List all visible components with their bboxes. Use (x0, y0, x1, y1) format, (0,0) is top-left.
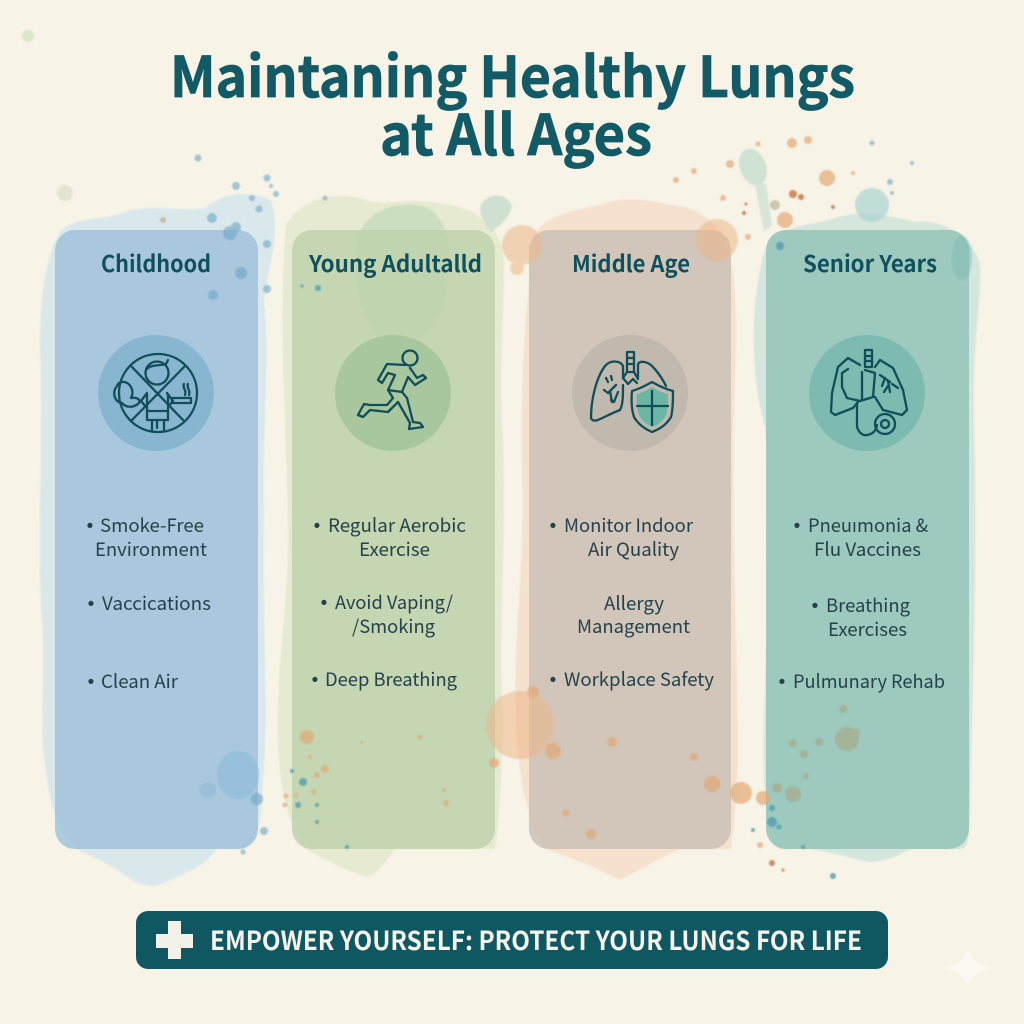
icon: no smoking child (98, 335, 214, 451)
list: Childhood: Smoke-Free (100, 512, 204, 538)
list: Young Adult: Exercise (359, 536, 430, 562)
heading: Middle Age: Middle Age (572, 245, 690, 279)
list: Young Adult: Deep Breathing (325, 666, 458, 692)
list: Childhood: • (88, 594, 94, 615)
title: at All Ages (380, 91, 652, 172)
icon: runner (335, 335, 451, 451)
banner: call to action (136, 911, 888, 969)
panel: Senior Years (766, 230, 969, 849)
list: Childhood: Vaccications (102, 590, 211, 616)
icon: lungs with stethoscope (809, 335, 925, 451)
list: Senior Years: Exercises (828, 616, 907, 642)
title: Maintaning Healthy Lungs (170, 33, 855, 114)
banner text: EMPOWER YOURSELF: PROTECT YOUR LUNGS FOR LIFE (210, 921, 862, 958)
list: Middle Age: Management (577, 613, 690, 639)
watercolor washes behind panels (40, 194, 980, 886)
heading: Young Adultalld: Young Adultalld (308, 245, 482, 279)
icon: medical cross (156, 921, 193, 959)
list: Middle Age: Monitor Indoor (564, 512, 694, 538)
panel: Young Adulthood (292, 230, 495, 849)
list: Childhood: Clean Air (101, 668, 179, 694)
decorative sparkle (946, 947, 990, 989)
list: Senior Years: Breathing (826, 592, 911, 618)
paint splatters (22, 30, 972, 879)
panel: Middle Age (529, 230, 731, 849)
heading: Senior Years: Senior Years (803, 245, 937, 279)
list: Middle Age: Air Quality (588, 536, 679, 562)
panel: Childhood (55, 230, 258, 849)
list: Senior Years: • (779, 672, 785, 693)
list: Young Adult: • (312, 670, 318, 691)
list: Senior Years: • (812, 596, 818, 617)
list: Middle Age (550, 512, 714, 692)
list: Young Adult: • (321, 593, 327, 614)
list: Young Adult (312, 512, 466, 692)
list: Middle Age: • (550, 516, 556, 537)
list: Childhood: Environment (95, 536, 207, 562)
list: Childhood: • (88, 672, 94, 693)
icon: lungs with shield (572, 335, 688, 451)
title (170, 33, 855, 172)
list: Senior Years: • (794, 516, 800, 537)
list: Young Adult: Avoid Vaping/ (335, 589, 453, 615)
list: Childhood: • (87, 516, 93, 537)
list: Middle Age: Allergy (604, 590, 664, 616)
list: Young Adult: Regular Aerobic (328, 512, 466, 538)
list: Young Adult: • (314, 516, 320, 537)
list: Young Adult: /Smoking (352, 613, 436, 639)
list: Senior Years: Pneuımonia & (808, 512, 928, 538)
list: Senior Years: Flu Vaccines (814, 536, 921, 562)
list: Middle Age: Workplace Safety (564, 666, 714, 692)
heading: Childhood: Childhood (101, 245, 211, 279)
list: Senior Years (779, 512, 945, 694)
list: Childhood (87, 512, 211, 694)
list: Middle Age: • (550, 670, 556, 691)
list: Senior Years: Pulmunary Rehab (793, 668, 945, 694)
